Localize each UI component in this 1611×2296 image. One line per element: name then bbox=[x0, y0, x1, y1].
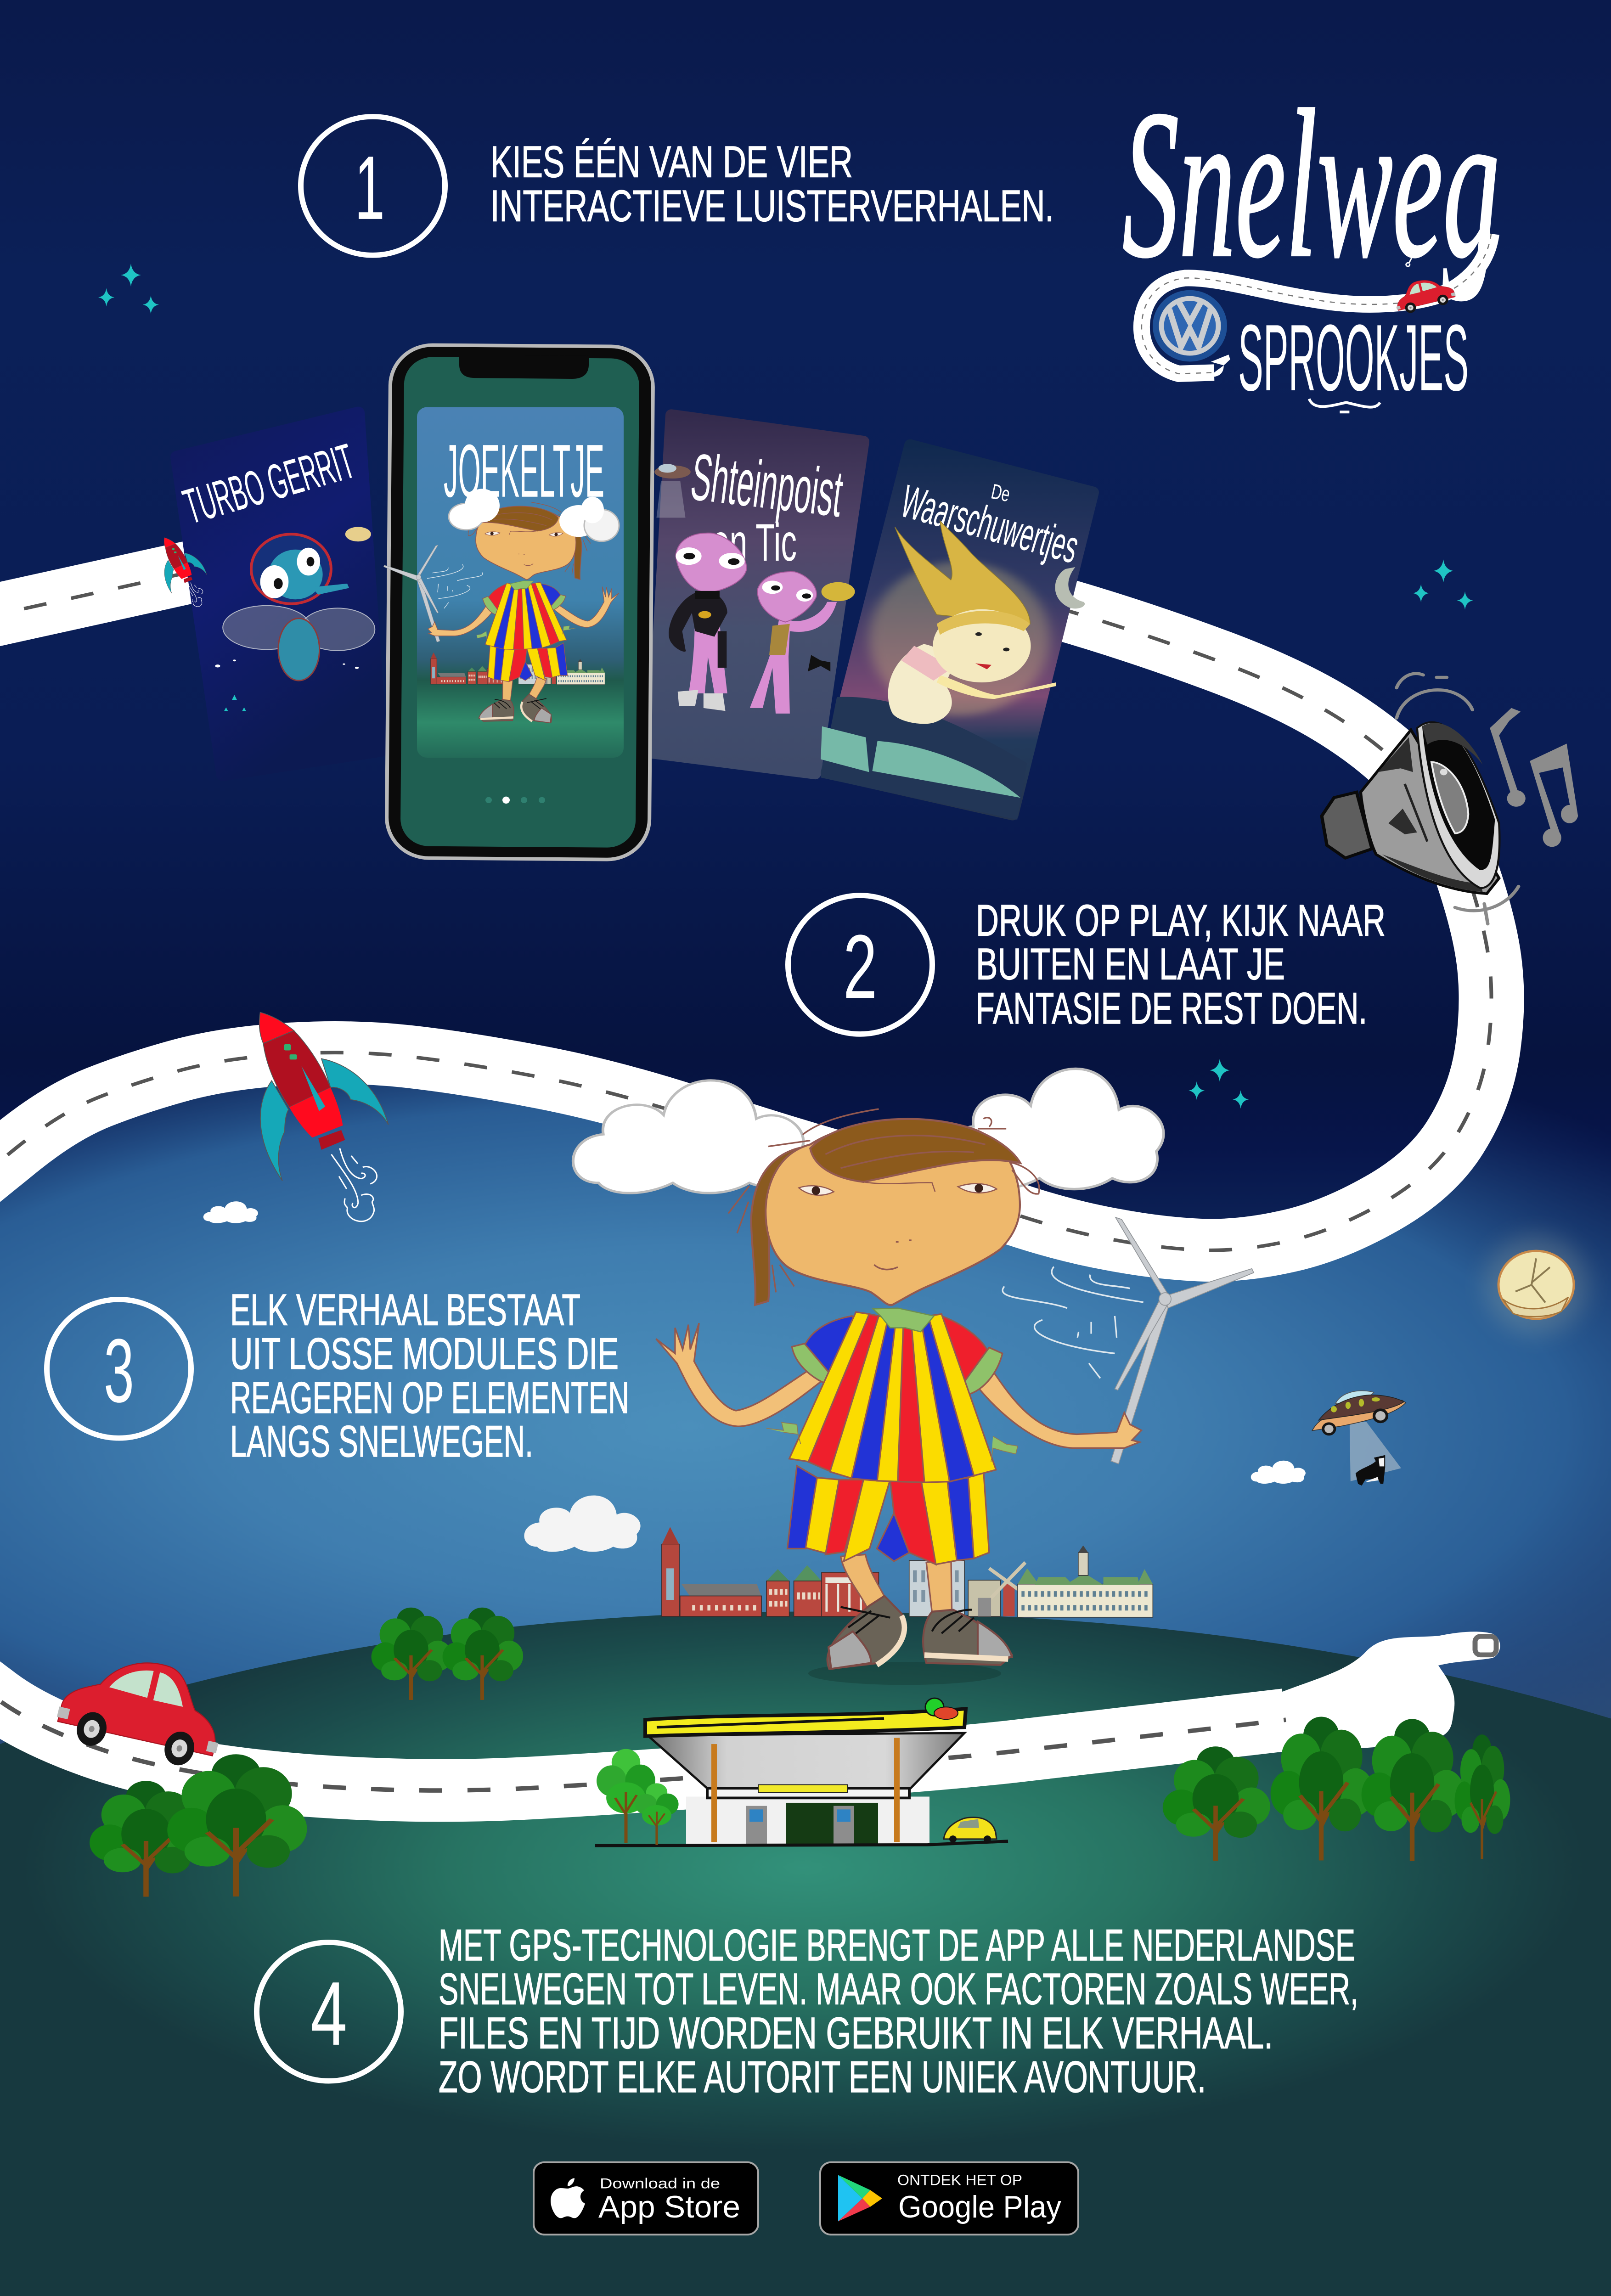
windmill bbox=[1003, 1584, 1014, 1616]
step 2 text: FANTASIE DE REST DOEN. bbox=[976, 984, 1367, 1033]
phone notch bbox=[459, 355, 589, 379]
trees bottom left bbox=[90, 1754, 307, 1896]
phone clouds bbox=[449, 489, 619, 541]
icon: play triangle bbox=[838, 2175, 882, 2222]
step 4 text: ZO WORDT ELKE AUTORIT EEN UNIEK AVONTUUR. bbox=[439, 2052, 1206, 2101]
step 2 text: DRUK OP PLAY, KIJK NAAR bbox=[976, 895, 1386, 945]
phone mini character bbox=[383, 502, 619, 723]
rocket windows bbox=[284, 1044, 291, 1051]
step 2 text bbox=[976, 895, 1386, 1033]
yellow car bbox=[944, 1818, 997, 1842]
text: JOEKELTJE bbox=[444, 429, 604, 513]
rocket nozzle bbox=[318, 1130, 345, 1150]
left shoe bbox=[828, 1596, 904, 1669]
step 3 text bbox=[230, 1285, 629, 1466]
App Store button bbox=[534, 2162, 758, 2234]
card title: Waarschuwertjes bbox=[896, 475, 1085, 573]
step 4 text bbox=[439, 1920, 1358, 2101]
card: Turbo Gerrit bbox=[177, 413, 381, 775]
white church bbox=[909, 1560, 964, 1616]
phone card bbox=[417, 407, 624, 758]
flags bbox=[766, 1423, 1018, 1462]
rocket smoke bbox=[331, 1148, 377, 1221]
card: De Waarschuwertjes bbox=[821, 445, 1093, 820]
gate building bbox=[968, 1580, 1001, 1616]
icon: apple bbox=[551, 2178, 585, 2218]
step 3 number: 3 bbox=[104, 1320, 134, 1421]
card: Turbo Gerrit: TURBO GERRIT bbox=[177, 433, 361, 535]
hair back bbox=[751, 1147, 803, 1305]
small cloud top left bbox=[203, 1201, 258, 1223]
card: Shteinpoist en Tic: Shteinpoist bbox=[687, 440, 847, 531]
card title small: De bbox=[989, 479, 1012, 506]
head bbox=[766, 1120, 1020, 1305]
road: winding main road bbox=[0, 594, 1492, 1250]
small cloud right bbox=[1251, 1461, 1306, 1484]
tree at station bbox=[597, 1749, 679, 1845]
step 2 number: 2 bbox=[843, 916, 877, 1017]
eyes bbox=[799, 1186, 834, 1195]
pumps bbox=[746, 1806, 767, 1845]
skyline of Dutch buildings bbox=[662, 1527, 1153, 1617]
button caption: ONTDEK HET OP bbox=[897, 2172, 1022, 2189]
UFO car abducting a cow bbox=[1312, 1391, 1406, 1486]
town hall tower bbox=[662, 1545, 679, 1616]
large cream palace bbox=[1018, 1584, 1153, 1617]
fingernail bbox=[1475, 1636, 1496, 1655]
step 4 text: FILES EN TIJD WORDEN GEBRUIKT IN ELK VERHAAL. bbox=[439, 2008, 1273, 2058]
sleeves bbox=[792, 1316, 1003, 1396]
red beetle car bbox=[52, 1645, 233, 1773]
poles bbox=[711, 1744, 717, 1842]
rocket bbox=[259, 1012, 389, 1221]
long brick building bbox=[682, 1584, 761, 1597]
step 1 text: KIES ÉÉN VAN DE VIER bbox=[490, 137, 853, 186]
Google Play button bbox=[820, 2162, 1078, 2234]
saucer upper body bbox=[1318, 1395, 1404, 1420]
small rocket on left road bbox=[164, 538, 207, 607]
small yellow sign bbox=[758, 1785, 847, 1793]
fly illustration bbox=[215, 527, 375, 711]
logo car bbox=[1391, 273, 1457, 316]
dome bbox=[1335, 1391, 1374, 1404]
step 2 text: BUITEN EN LAAT JE bbox=[976, 939, 1285, 989]
sparkles bbox=[98, 264, 1473, 1109]
sky bbox=[0, 1051, 1611, 1899]
road: lower road ending in pointing hand bbox=[0, 1632, 1500, 1790]
phone body bbox=[386, 345, 653, 860]
shoe shadow bbox=[808, 1662, 1001, 1685]
card subtitle: en Tic bbox=[712, 512, 797, 572]
collar bbox=[873, 1308, 934, 1332]
windows bbox=[1331, 1397, 1380, 1412]
ground line bbox=[595, 1841, 1008, 1846]
ground hill bbox=[0, 1612, 1611, 2296]
wind lines bbox=[1003, 1266, 1143, 1378]
gas station bbox=[595, 1698, 1008, 1846]
shorts bbox=[787, 1466, 989, 1564]
cow bbox=[1356, 1455, 1385, 1486]
big cloud right bbox=[945, 1069, 1164, 1189]
step 1 text bbox=[490, 137, 1054, 231]
step 4 number bbox=[257, 1942, 401, 2081]
button name: App Store bbox=[598, 2189, 740, 2224]
aliens illustration bbox=[654, 464, 855, 714]
wind turbine bbox=[1111, 1217, 1254, 1464]
big cloud left bbox=[573, 1080, 803, 1193]
Joekeltje character bbox=[656, 1109, 1254, 1669]
entrance bbox=[786, 1803, 878, 1845]
rocket body bbox=[263, 1030, 331, 1107]
right shoe bbox=[923, 1610, 1012, 1665]
moon bbox=[1485, 1235, 1588, 1334]
road: left stub behind cards bbox=[0, 568, 211, 619]
logo music note bbox=[1406, 253, 1413, 266]
step 4 number: 4 bbox=[310, 1963, 347, 2064]
step 1 text: INTERACTIEVE LUISTERVERHALEN. bbox=[490, 181, 1054, 231]
logo: Snelweg Sprookjes bbox=[1122, 66, 1499, 412]
left arm bbox=[656, 1323, 822, 1426]
speaker with music notes bbox=[1322, 674, 1578, 924]
button name: Google Play bbox=[898, 2189, 1062, 2224]
button caption: Download in de bbox=[600, 2175, 720, 2191]
saucer lower body bbox=[1312, 1400, 1406, 1431]
step 3 text: ELK VERHAAL BESTAAT bbox=[230, 1285, 580, 1334]
trees bottom right bbox=[1163, 1716, 1510, 1861]
phone with Joekeltje card bbox=[383, 345, 653, 860]
canopy underside bbox=[648, 1733, 964, 1790]
step 3 number bbox=[47, 1300, 191, 1438]
small cloud middle bbox=[524, 1496, 641, 1552]
step 3 text: REAGEREN OP ELEMENTEN bbox=[230, 1373, 629, 1423]
legs bbox=[841, 1554, 884, 1610]
wheels bbox=[1322, 1408, 1388, 1435]
step 2 number bbox=[788, 895, 932, 1034]
page dots bbox=[485, 797, 545, 804]
building bbox=[686, 1796, 929, 1845]
step 1 number: 1 bbox=[355, 137, 385, 238]
logo road swoosh bbox=[1142, 234, 1491, 412]
hair top bbox=[810, 1119, 1020, 1182]
rocket fins bbox=[260, 1058, 389, 1181]
small gabled house bbox=[766, 1569, 789, 1581]
fairy girl illustration bbox=[821, 521, 1085, 820]
light beam bbox=[1350, 1422, 1401, 1481]
step 1 number bbox=[301, 117, 445, 255]
trees on the hill bbox=[372, 1608, 523, 1700]
logo VW badge bbox=[1153, 290, 1227, 362]
step 3 text: LANGS SNELWEGEN. bbox=[230, 1417, 533, 1466]
brick house with columns bbox=[794, 1565, 822, 1581]
roof fruit logo bbox=[925, 1698, 958, 1719]
striped poncho bbox=[789, 1312, 996, 1482]
right arm bbox=[978, 1371, 1141, 1448]
phone skyline bbox=[431, 653, 605, 685]
card: Shteinpoist en Tic bbox=[652, 415, 863, 774]
mouth and nose bbox=[874, 1240, 912, 1270]
yellow roof bbox=[645, 1709, 966, 1736]
step 3 text: UIT LOSSE MODULES DIE bbox=[230, 1329, 619, 1378]
